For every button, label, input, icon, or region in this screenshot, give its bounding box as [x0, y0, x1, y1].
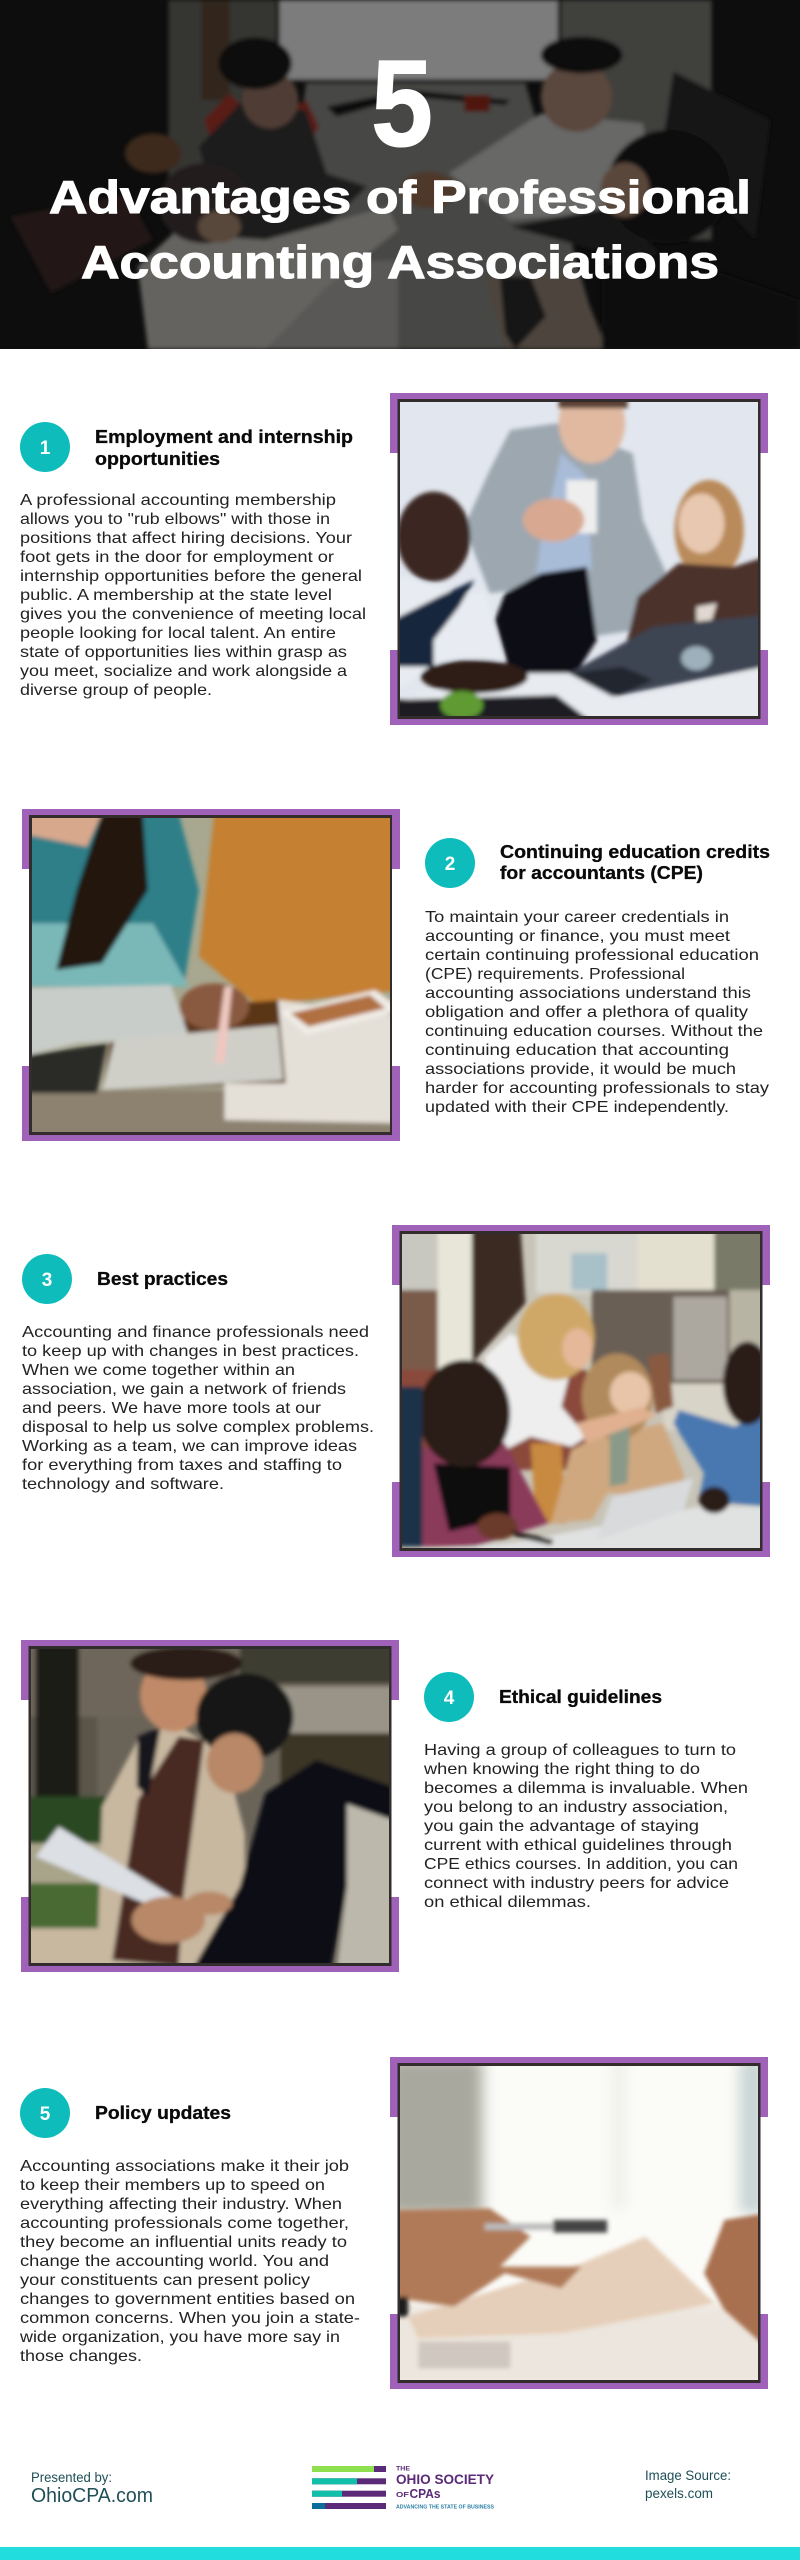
- body text 2: accounting associations understand this: [425, 985, 751, 1002]
- body text 5: everything affecting their industry. When: [20, 2196, 342, 2213]
- body text 2: updated with their CPE independently.: [425, 1099, 729, 1116]
- body text 3: association, we gain a network of friends: [22, 1381, 346, 1398]
- body text 1: positions that affect hiring decisions. Your: [20, 530, 353, 547]
- body text 2: (CPE) requirements. Professional: [425, 966, 685, 983]
- body text 5: to keep their members up to speed on: [20, 2177, 325, 2194]
- body text 2: accounting or finance, you must meet: [425, 928, 731, 945]
- body text 4: current with ethical guidelines through: [424, 1837, 732, 1854]
- number badge 5: 5: [40, 2104, 51, 2125]
- body text 4: you belong to an industry association,: [424, 1799, 728, 1816]
- body text 1: foot gets in the door for employment or: [20, 549, 335, 566]
- body text 3: Working as a team, we can improve ideas: [22, 1438, 357, 1455]
- body text 2: associations provide, it would be much: [425, 1061, 736, 1078]
- title: Advantages of Professional: [49, 171, 751, 223]
- body text 3: disposal to help us solve complex problems.: [22, 1419, 374, 1436]
- number badge 4: [424, 1672, 474, 1722]
- body text 1: A professional accounting membership: [20, 492, 336, 509]
- number badge 4: 4: [444, 1688, 455, 1709]
- body text 5: those changes.: [20, 2348, 142, 2365]
- body text 4: CPE ethics courses. In addition, you can: [424, 1856, 738, 1873]
- logo: The Ohio Society of CPAs: OHIO SOCIETY: [396, 2471, 495, 2487]
- panel: ethical guidelines: [20, 1640, 748, 1972]
- header banner: [0, 0, 800, 349]
- body text 3: for everything from taxes and staffing to: [22, 1457, 342, 1474]
- body text 1: diverse group of people.: [20, 682, 212, 699]
- body text 4: connect with industry peers for advice: [424, 1875, 729, 1892]
- body text 1: gives you the convenience of meeting local: [20, 606, 366, 623]
- heading 2: [500, 842, 770, 883]
- body text 4: Having a group of colleagues to turn to: [424, 1742, 736, 1759]
- body text 5: change the accounting world. You and: [20, 2253, 329, 2270]
- number badge 2: [425, 838, 475, 888]
- title: [49, 171, 751, 288]
- number badge 1: [20, 422, 70, 472]
- heading 5: Policy updates: [95, 2103, 231, 2123]
- body text 2: [425, 909, 769, 1116]
- body text 4: you gain the advantage of staying: [424, 1818, 699, 1835]
- framed photo 1: colleagues at a laptop: [390, 383, 768, 725]
- body text 5: Accounting associations make it their job: [20, 2158, 349, 2175]
- body text 1: allows you to "rub elbows" with those in: [20, 511, 330, 528]
- number badge 1: 1: [40, 438, 51, 459]
- image source credit: [645, 2468, 731, 2501]
- heading 1: opportunities: [95, 449, 220, 469]
- panel: employment and internship opportunities: [20, 383, 768, 725]
- body text 3: to keep up with changes in best practices.: [22, 1343, 359, 1360]
- body text 4: on ethical dilemmas.: [424, 1894, 591, 1911]
- title: Accounting Associations: [81, 236, 719, 288]
- presented by credit: Presented by:: [31, 2470, 112, 2485]
- body text 5: your constituents can present policy: [20, 2272, 310, 2289]
- body text 2: obligation and offer a plethora of quality: [425, 1004, 748, 1021]
- heading 1: [95, 427, 353, 469]
- body text 5: common concerns. When you join a state-: [20, 2310, 360, 2327]
- panel: policy updates: [19, 2057, 770, 2389]
- framed photo 5: handing over a document: [388, 2057, 770, 2389]
- body text 3: technology and software.: [22, 1476, 224, 1493]
- body text 3: When we come together within an: [22, 1362, 295, 1379]
- panel: continuing education credits: [20, 809, 770, 1141]
- framed photo 3: group high-five in a library: [392, 1225, 772, 1557]
- body text 2: continuing education courses. Without the: [425, 1023, 763, 1040]
- body text 2: continuing education that accounting: [425, 1042, 729, 1059]
- body text 3: and peers. We have more tools at our: [22, 1400, 322, 1417]
- logo: The Ohio Society of CPAs: CPAs: [410, 2486, 440, 2501]
- body text 4: [423, 1742, 748, 1911]
- number badge 3: 3: [42, 1270, 52, 1291]
- body text 3: [22, 1324, 374, 1493]
- body text 2: harder for accounting professionals to stay: [425, 1080, 769, 1097]
- body text 4: when knowing the right thing to do: [423, 1761, 700, 1778]
- body text 1: you meet, socialize and work alongside a: [20, 663, 347, 680]
- body text 1: people looking for local talent. An entire: [20, 625, 336, 642]
- framed photo 4: two students reading a notebook: [20, 1640, 399, 1972]
- framed photo 2: two people studying documents: [20, 809, 403, 1141]
- number badge 3: [22, 1254, 72, 1304]
- header photo: team meeting, darkened: [0, 0, 800, 349]
- body text 1: public. A membership at the state level: [20, 587, 332, 604]
- logo: The Ohio Society of CPAs: ADVANCING THE STATE OF BUSINESS: [396, 2505, 495, 2511]
- body text 5: they become an influential units ready to: [20, 2234, 347, 2251]
- heading 1: Employment and internship: [95, 427, 353, 447]
- logo: The Ohio Society of CPAs: [312, 2466, 495, 2511]
- logo: The Ohio Society of CPAs: THE: [396, 2466, 410, 2472]
- body text 1: state of opportunities lies within grasp as: [20, 644, 347, 661]
- presented by credit: OhioCPA.com: [31, 2485, 153, 2507]
- number badge 2: 2: [445, 854, 455, 875]
- footer: [31, 2466, 731, 2511]
- body text 1: [20, 492, 366, 699]
- body text 3: Accounting and finance professionals need: [22, 1324, 369, 1341]
- body text 2: To maintain your career credentials in: [425, 909, 729, 926]
- big number 5: 5: [371, 36, 433, 173]
- body text 2: certain continuing professional education: [425, 947, 759, 964]
- bottom accent bar: [0, 2547, 800, 2560]
- body text 1: internship opportunities before the general: [20, 568, 362, 585]
- body text 4: becomes a dilemma is invaluable. When: [424, 1780, 748, 1797]
- heading 2: Continuing education credits: [500, 842, 770, 862]
- heading 3: Best practices: [97, 1269, 228, 1289]
- panel: best practices: [22, 1225, 772, 1557]
- heading 2: for accountants (CPE): [500, 863, 703, 883]
- number badge 5: [20, 2088, 70, 2138]
- logo: The Ohio Society of CPAs: OF: [396, 2492, 410, 2499]
- body text 5: wide organization, you have more say in: [19, 2329, 340, 2346]
- image source credit: Image Source:: [645, 2468, 731, 2483]
- presented by credit: [31, 2470, 153, 2507]
- body text 5: [19, 2158, 360, 2365]
- heading 4: Ethical guidelines: [499, 1687, 662, 1707]
- body text 5: accounting professionals come together,: [20, 2215, 349, 2232]
- image source credit: pexels.com: [645, 2486, 713, 2501]
- body text 5: changes to government entities based on: [20, 2291, 355, 2308]
